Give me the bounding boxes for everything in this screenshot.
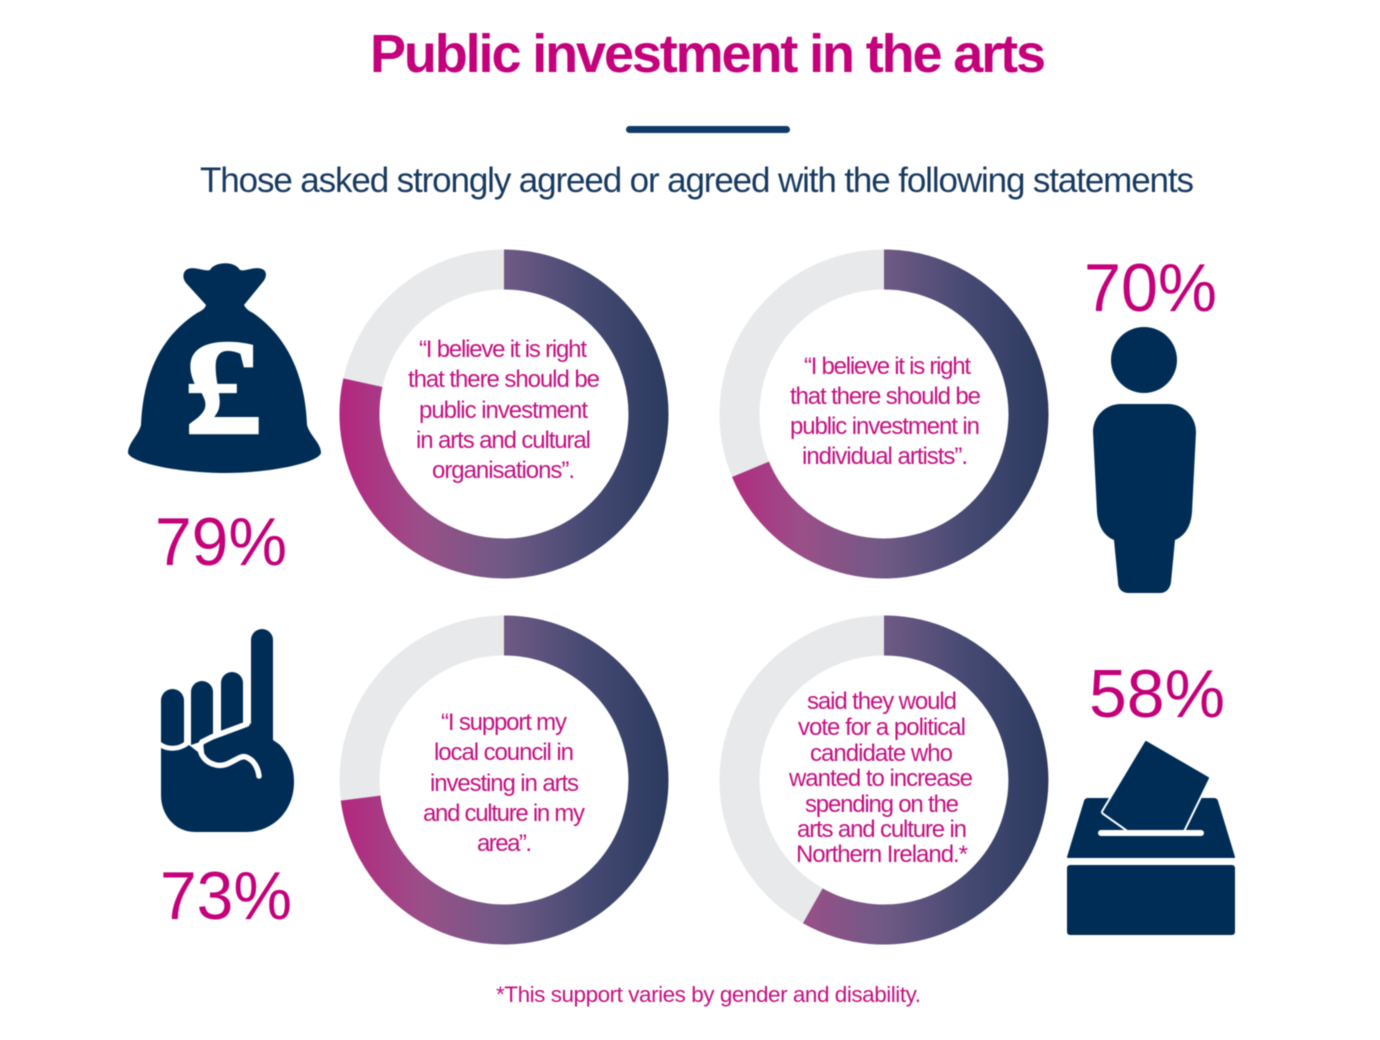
panel: 70% public investment in individual artists	[740, 250, 1217, 593]
quote text: “I believe it is right	[419, 336, 587, 363]
subtitle: Those asked strongly agreed or agreed with the following statements	[200, 161, 1194, 200]
panel: 58% vote for candidate	[740, 636, 1235, 935]
statement text: vote for a political	[798, 714, 966, 741]
statement text: spending on the	[805, 791, 959, 818]
panel: 73% support local council	[160, 629, 648, 934]
quote text: and culture in my	[423, 800, 585, 827]
statement text: arts and culture in	[797, 816, 967, 843]
quote text: individual artists”.	[802, 443, 968, 470]
quote text: “I believe it is right	[804, 353, 971, 380]
quote text: that there should be	[408, 366, 600, 393]
quote text: that there should be	[790, 383, 981, 410]
quote text: “I support my	[441, 709, 567, 736]
quote text: local council in	[434, 739, 574, 766]
icon: raised finger hand	[161, 629, 294, 832]
quote text: public investment	[419, 397, 588, 424]
icon: ballot box	[1067, 742, 1235, 935]
quote text	[423, 709, 585, 857]
donut chart 79%	[359, 270, 648, 558]
quote text: area”.	[477, 830, 532, 857]
quote text: investing in arts	[430, 770, 579, 797]
statement text: said they would	[807, 688, 957, 715]
icon: pound sign: £	[184, 311, 262, 463]
percentage 79%: 79%	[155, 504, 287, 580]
percentage 58%: 58%	[1089, 656, 1225, 732]
footnote: *This support varies by gender and disability.	[496, 982, 921, 1007]
panel: 79% public investment in organisations	[128, 263, 648, 580]
statement text: wanted to increase	[788, 765, 973, 792]
title underline	[626, 126, 790, 133]
donut chart 73%	[360, 636, 648, 924]
quote text	[408, 336, 600, 484]
icon: person	[1093, 327, 1196, 593]
title: Public investment in the arts	[370, 24, 1046, 84]
percentage 70%: 70%	[1084, 250, 1217, 326]
quote text: organisations”.	[432, 457, 575, 484]
icon: money bag	[128, 263, 321, 473]
statement text: candidate who	[810, 740, 953, 767]
donut chart 70%	[740, 270, 1028, 558]
quote text: public investment in	[790, 413, 980, 440]
statement text	[788, 688, 973, 868]
quote text	[790, 353, 981, 470]
quote text: in arts and cultural	[416, 427, 591, 454]
donut chart 58%	[740, 636, 1028, 924]
statement text: Northern Ireland.*	[796, 841, 968, 868]
percentage 73%: 73%	[160, 858, 292, 934]
